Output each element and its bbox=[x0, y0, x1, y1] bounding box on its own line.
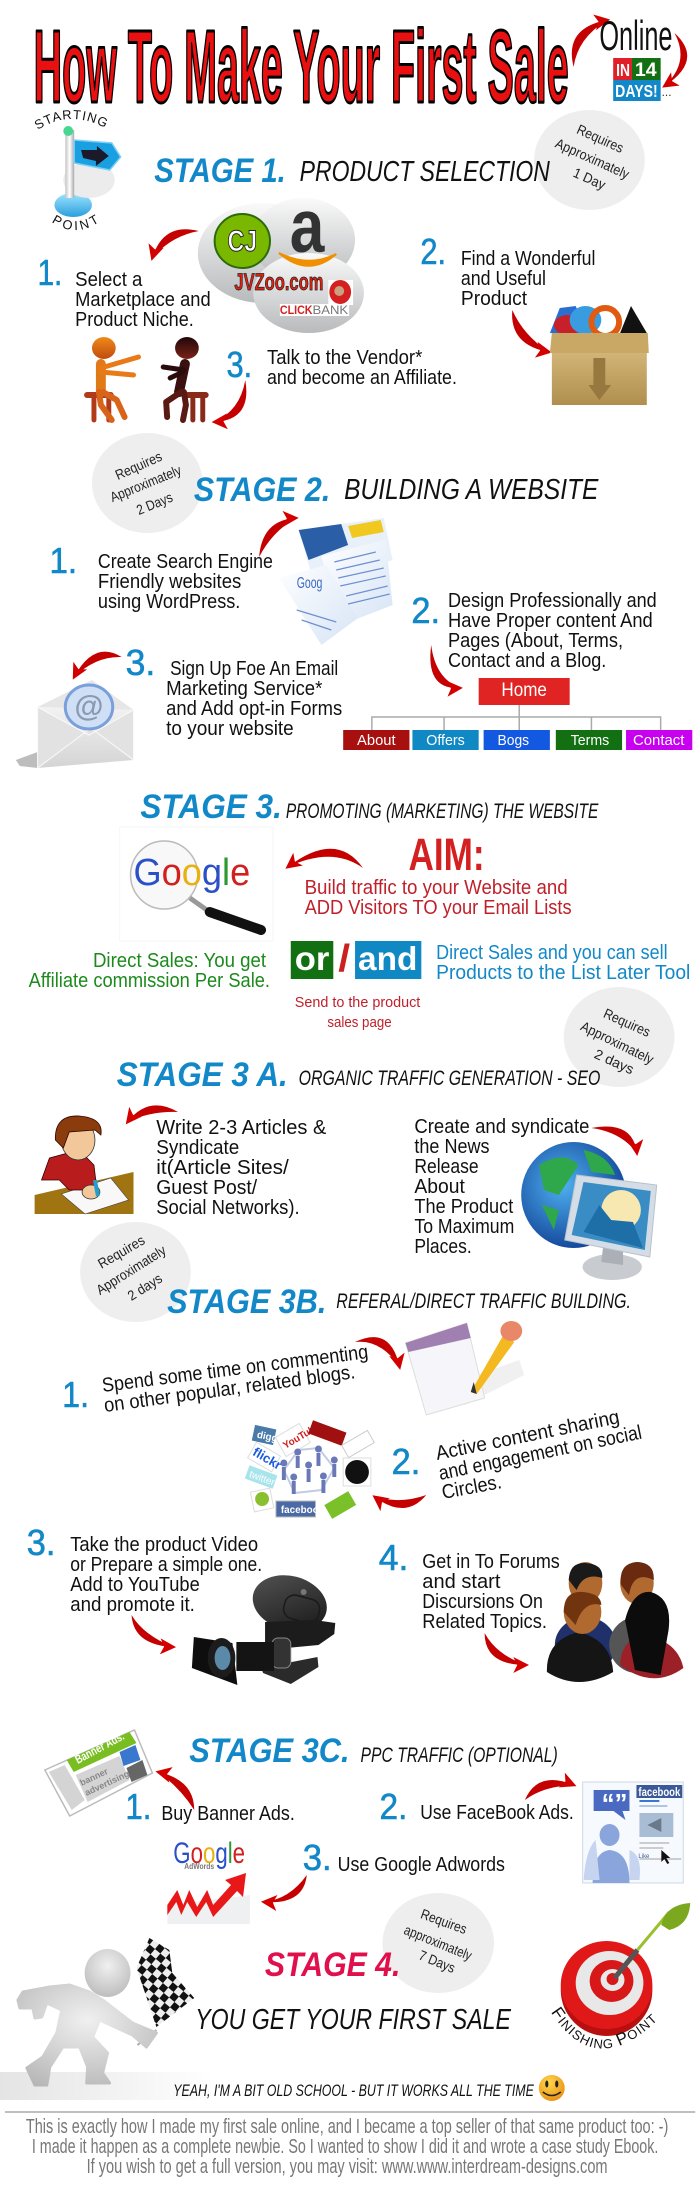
step 2: 2. bbox=[392, 1442, 420, 1482]
heading: stage 3a: STAGE 3 A. bbox=[117, 1056, 288, 1094]
about box: About bbox=[357, 733, 396, 749]
heading: stage 3b bbox=[167, 1283, 631, 1321]
home box bbox=[479, 678, 570, 705]
icon: social network cluster: flickr bbox=[250, 1444, 284, 1473]
heading: stage 3: PROMOTING (MARKETING) THE WEBSITE bbox=[286, 800, 599, 823]
icon: marketplace logos: CJ bbox=[227, 225, 257, 258]
arrow: step 2 to facebook bbox=[525, 1770, 574, 1800]
text: direct sales green bbox=[29, 950, 270, 992]
home box: Home bbox=[501, 680, 547, 701]
callout: requires 2 days: 2 days bbox=[592, 1046, 636, 1077]
icon: social network cluster bbox=[245, 1420, 374, 1519]
text: finishing point: FINISHING POINT bbox=[552, 2006, 655, 2049]
step 1 bbox=[125, 1786, 295, 1827]
step 1: Create Search Engine bbox=[98, 551, 273, 573]
step 4: Related Topics. bbox=[422, 1611, 547, 1633]
callout: requires 7 days bbox=[382, 1893, 494, 1993]
icon: smiley bbox=[539, 2075, 565, 2101]
step 2: and engagement on social bbox=[437, 1422, 644, 1485]
heading: stage 3 bbox=[140, 788, 599, 826]
icon: facebook ads panel: Like bbox=[638, 1854, 650, 1860]
terms box: Terms bbox=[571, 733, 609, 749]
step 3: to your website bbox=[166, 718, 294, 740]
text: news release: Create and syndicate bbox=[414, 1116, 589, 1138]
callout: requires 2 days: 2 days bbox=[125, 1270, 165, 1304]
text: news release: Places. bbox=[414, 1236, 472, 1258]
panel: stage 3 bbox=[29, 788, 690, 1031]
icon: marketplace logos: a bbox=[290, 184, 325, 268]
text: aim bbox=[305, 830, 572, 919]
heading: stage 3a bbox=[117, 1056, 600, 1094]
step 3: Sign Up Foe An Email bbox=[170, 658, 338, 680]
step 2: Product bbox=[461, 288, 528, 310]
chart: site navigation tree bbox=[343, 678, 692, 750]
icon: growth chart bbox=[167, 1873, 250, 1924]
icon: product box bbox=[550, 306, 649, 405]
icon: banner ad bbox=[45, 1729, 152, 1816]
heading: stage 3c: PPC TRAFFIC (OPTIONAL) bbox=[361, 1744, 558, 1767]
step 3 bbox=[126, 643, 342, 740]
text: send to sales page bbox=[295, 995, 421, 1031]
step 4: and start bbox=[422, 1571, 501, 1593]
callout: requires 2 days: Approximately bbox=[108, 462, 183, 505]
step 2 bbox=[392, 1406, 644, 1504]
text: news release bbox=[414, 1116, 589, 1258]
arrow: step 4 to people bbox=[485, 1633, 526, 1665]
step 4: Get in To Forums bbox=[422, 1551, 560, 1573]
or and badges: and bbox=[358, 940, 417, 977]
panel: stage 1 bbox=[38, 110, 649, 422]
step 1: 1. bbox=[49, 541, 77, 581]
icon: group of people bbox=[547, 1562, 683, 1682]
callout: requires 7 days: 7 Days bbox=[417, 1947, 458, 1976]
step 3: and become an Affiliate. bbox=[267, 367, 457, 389]
icon: banner ad: advertising bbox=[83, 1768, 131, 1798]
panel: stage 3a bbox=[35, 987, 674, 1280]
text: write articles: Syndicate bbox=[156, 1137, 239, 1159]
panel: stage 3b bbox=[27, 1222, 683, 1685]
heading: stage 3a: ORGANIC TRAFFIC GENERATION - SEO bbox=[299, 1067, 600, 1090]
callout: requires 7 days: approximately bbox=[402, 1921, 474, 1963]
step 3: and promote it. bbox=[70, 1594, 195, 1616]
panel: stage 2 bbox=[16, 433, 692, 768]
text: aim: ADD Visitors TO your Email Lists bbox=[305, 897, 572, 919]
step 2: Contact and a Blog. bbox=[448, 650, 606, 672]
icon: social network cluster: YouTube bbox=[281, 1421, 323, 1452]
heading: stage 3: STAGE 3. bbox=[140, 788, 282, 826]
arrow: logos to step 1 bbox=[152, 222, 199, 258]
text: news release: To Maximum bbox=[414, 1216, 514, 1238]
step 1: Select a bbox=[75, 269, 143, 291]
lower stages bbox=[0, 1729, 696, 2178]
icon: email envelope: @ bbox=[75, 690, 103, 723]
icon: website collage: Goog bbox=[297, 575, 322, 592]
text: news release: About bbox=[414, 1176, 465, 1198]
icon: email envelope bbox=[16, 680, 134, 768]
heading: you get your first sale: YOU GET YOUR FIRST SALE bbox=[195, 2004, 511, 2036]
in 14 days block bbox=[613, 58, 672, 101]
text: write articles bbox=[156, 1117, 326, 1219]
step 1 bbox=[62, 1341, 369, 1417]
step 3: Add to YouTube bbox=[70, 1574, 200, 1596]
icon: marketplace logos: JVZoo.com bbox=[234, 269, 323, 296]
heading: stage 1: PRODUCT SELECTION bbox=[300, 156, 550, 188]
callout: requires 2 days: Requires bbox=[601, 1005, 653, 1040]
step 2 bbox=[420, 232, 595, 310]
in 14 days block: 14 bbox=[635, 60, 657, 81]
step 3: or Prepare a simple one. bbox=[70, 1554, 262, 1576]
panel: stage 3c bbox=[45, 1729, 683, 1924]
badge: online in 14 days bbox=[564, 12, 700, 101]
step 3: Talk to the Vendor* bbox=[267, 347, 423, 369]
callout: requires 1 day bbox=[534, 110, 645, 210]
step 1: using WordPress. bbox=[98, 591, 240, 613]
step 2: Design Professionally and bbox=[448, 590, 657, 612]
offers box bbox=[412, 730, 479, 750]
step 2: 2. bbox=[379, 1786, 407, 1827]
terms box bbox=[556, 730, 622, 750]
step 3 bbox=[27, 1523, 262, 1616]
step 1: 1. bbox=[62, 1375, 89, 1415]
icon: website collage bbox=[279, 518, 393, 645]
step 1: Spend some time on commenting bbox=[101, 1341, 369, 1397]
heading: stage 3c: STAGE 3C. bbox=[189, 1732, 350, 1770]
heading: stage 2: STAGE 2. bbox=[194, 471, 330, 509]
icon: boy writing bbox=[35, 1116, 134, 1214]
text: old school note: YEAH, I'M A BIT OLD SCHOOL - BUT IT WORKS ALL THE TIME bbox=[173, 2081, 534, 2100]
in 14 days block: DAYS! bbox=[615, 81, 658, 101]
arrow: step 3 to envelope bbox=[74, 640, 122, 677]
arrow: step 1 to websites bbox=[259, 518, 296, 557]
step 2: 2. bbox=[411, 591, 440, 631]
icon: marketplace logos: CLICK bbox=[280, 303, 313, 317]
heading: stage 3b: STAGE 3B. bbox=[167, 1283, 326, 1321]
blogs box bbox=[484, 730, 550, 750]
icon: google magnifier bbox=[120, 827, 273, 941]
text: aim: AIM: bbox=[408, 830, 485, 880]
step 2: Pages (About, Terms, bbox=[448, 630, 623, 652]
icon: starting point signpost: STARTING bbox=[34, 110, 107, 129]
step 1 bbox=[38, 253, 211, 331]
step 1: 1. bbox=[125, 1786, 151, 1827]
callout: requires 2 days bbox=[92, 433, 203, 533]
arrow: step 1 to notepad bbox=[355, 1325, 400, 1367]
contact box: Contact bbox=[633, 733, 685, 749]
offers box: Offers bbox=[426, 733, 465, 749]
heading: stage 4: STAGE 4. bbox=[265, 1946, 400, 1984]
step 4 bbox=[379, 1538, 560, 1633]
arrow: aim to google bbox=[288, 830, 363, 868]
icon: running figure with flag bbox=[0, 1938, 214, 2100]
text: send to sales page: sales page bbox=[327, 1015, 392, 1031]
icon: social network cluster: facebook bbox=[281, 1505, 325, 1516]
upper stages bbox=[16, 8, 692, 1685]
text: direct sales blue: Direct Sales and you can sell bbox=[436, 942, 668, 964]
step 1 bbox=[49, 541, 273, 613]
icon: starting point signpost bbox=[34, 110, 122, 230]
icon: google adwords: Google bbox=[173, 1837, 245, 1870]
contact box bbox=[626, 730, 692, 750]
step 3: Take the product Video bbox=[70, 1534, 258, 1556]
arrow: left of badge bbox=[564, 20, 607, 67]
heading: stage 2: BUILDING A WEBSITE bbox=[344, 474, 599, 506]
icon: social network cluster: digg bbox=[256, 1430, 279, 1445]
text: news release: the News bbox=[414, 1136, 490, 1158]
step 1: Buy Banner Ads. bbox=[161, 1803, 295, 1825]
icon: starting point signpost: POINT bbox=[52, 214, 96, 230]
or and badges bbox=[291, 938, 421, 980]
callout: requires 1 day: Requires bbox=[575, 121, 626, 156]
or and badges: / bbox=[338, 938, 351, 980]
footer text bbox=[26, 2116, 668, 2178]
step 3 bbox=[226, 345, 457, 389]
step 3 bbox=[303, 1837, 505, 1878]
step 2: Circles. bbox=[440, 1471, 503, 1504]
text: aim: Build traffic to your Website and bbox=[305, 877, 568, 899]
text: write articles: Social Networks). bbox=[156, 1197, 300, 1219]
icon: notepad and pencil bbox=[405, 1321, 524, 1415]
arrow: step 2 to sitemap bbox=[425, 645, 460, 690]
heading: stage 3c bbox=[189, 1732, 558, 1770]
about box bbox=[343, 730, 409, 750]
callout: requires 2 days: Approximately bbox=[93, 1242, 169, 1298]
icon: marketplace logos bbox=[198, 184, 364, 333]
step 2: and Useful bbox=[461, 268, 546, 290]
step 1: Product Niche. bbox=[75, 309, 194, 331]
in 14 days block: IN bbox=[616, 60, 630, 80]
arrow: text to globe bbox=[591, 1120, 637, 1153]
callout: requires 2 days: Approximately bbox=[578, 1018, 656, 1067]
arrow: step 3 to figures bbox=[215, 380, 252, 422]
text: news release: Release bbox=[414, 1156, 479, 1178]
icon: google magnifier: Google bbox=[134, 852, 250, 894]
step 4: Discursions On bbox=[422, 1591, 543, 1613]
arrow: step 3 to chart bbox=[264, 1875, 307, 1905]
step 2: Active content sharing bbox=[434, 1406, 621, 1465]
icon: banner ad: banner bbox=[78, 1766, 110, 1788]
arrow: step 3 to camera bbox=[132, 1615, 173, 1647]
callout: requires 1 day: 1 Day bbox=[571, 164, 608, 193]
step 2: Have Proper content And bbox=[448, 610, 653, 632]
icon: video camera bbox=[192, 1568, 335, 1685]
callout: requires 2 days bbox=[80, 1222, 191, 1322]
step 4: 4. bbox=[379, 1538, 408, 1578]
heading: stage 2 bbox=[194, 471, 599, 509]
icon: facebook ads panel: “” bbox=[602, 1790, 627, 1818]
step 3: Marketing Service* bbox=[166, 678, 323, 700]
arrow: text to writer bbox=[128, 1095, 178, 1122]
step 2: 2. bbox=[420, 232, 446, 272]
text: news release: The Product bbox=[414, 1196, 514, 1218]
text: write articles: it(Article Sites/ bbox=[156, 1157, 289, 1179]
step 2 bbox=[379, 1786, 574, 1827]
callout: requires 2 days: Requires bbox=[113, 448, 164, 483]
callout: requires 7 days: Requires bbox=[419, 1906, 469, 1937]
arrow: step 1 to banner bbox=[158, 1772, 194, 1810]
blogs box: Bogs bbox=[497, 733, 529, 749]
text: send to sales page: Send to the product bbox=[295, 995, 421, 1011]
callout: requires 2 days: Requires bbox=[95, 1232, 147, 1272]
or and badges: or bbox=[295, 940, 330, 977]
icon: facebook ads panel bbox=[583, 1782, 683, 1883]
icon: social network cluster: twitter bbox=[248, 1469, 277, 1489]
icon: banner ad: Banner Ads. bbox=[73, 1729, 127, 1767]
arrow: step 2 to box bbox=[509, 310, 549, 352]
step 2 bbox=[411, 590, 657, 672]
text: direct sales green: Direct Sales: You get bbox=[93, 950, 266, 972]
step 3: 3. bbox=[303, 1837, 332, 1878]
step 3: 3. bbox=[126, 643, 155, 683]
in 14 days block: ... bbox=[662, 85, 672, 99]
arrow: right of badge bbox=[665, 33, 700, 86]
heading: stage 1 bbox=[154, 152, 550, 190]
icon: marketplace logos: BANK bbox=[313, 303, 348, 317]
arrow: step 2 to cluster bbox=[375, 1495, 426, 1520]
step 3: Use Google Adwords bbox=[338, 1854, 505, 1876]
step 3: 3. bbox=[226, 345, 252, 385]
icon: target with dart bbox=[561, 1903, 690, 2036]
text: direct sales blue: Products to the List Later Tool bbox=[436, 962, 690, 984]
heading: stage 1: STAGE 1. bbox=[154, 152, 286, 190]
step 1: Friendly websites bbox=[98, 571, 241, 593]
icon: globe and monitor bbox=[521, 1142, 657, 1280]
step 3: and Add opt-in Forms bbox=[166, 698, 342, 720]
step 1: Marketplace and bbox=[75, 289, 211, 311]
step 1: 1. bbox=[38, 253, 62, 293]
panel: stage 4 bbox=[0, 1893, 690, 2101]
icon: two seated figures bbox=[87, 337, 206, 420]
step 2: Use FaceBook Ads. bbox=[420, 1802, 574, 1824]
text: write articles: Guest Post/ bbox=[156, 1177, 258, 1199]
text: direct sales green: Affiliate commission Per Sale. bbox=[29, 970, 270, 992]
callout: requires 2 days: 2 Days bbox=[134, 489, 175, 518]
icon: google adwords: AdWords bbox=[184, 1862, 215, 1871]
callout: requires 2 days bbox=[564, 987, 674, 1087]
step 3: 3. bbox=[27, 1523, 55, 1563]
icon: facebook ads panel: facebook bbox=[638, 1785, 681, 1799]
step 1: on other popular, related blogs. bbox=[103, 1361, 356, 1417]
text: write articles: Write 2-3 Articles & bbox=[156, 1117, 326, 1139]
step 2: Find a Wonderful bbox=[461, 248, 595, 270]
callout: requires 1 day: Approximately bbox=[553, 135, 632, 182]
text: direct sales blue bbox=[436, 942, 690, 984]
